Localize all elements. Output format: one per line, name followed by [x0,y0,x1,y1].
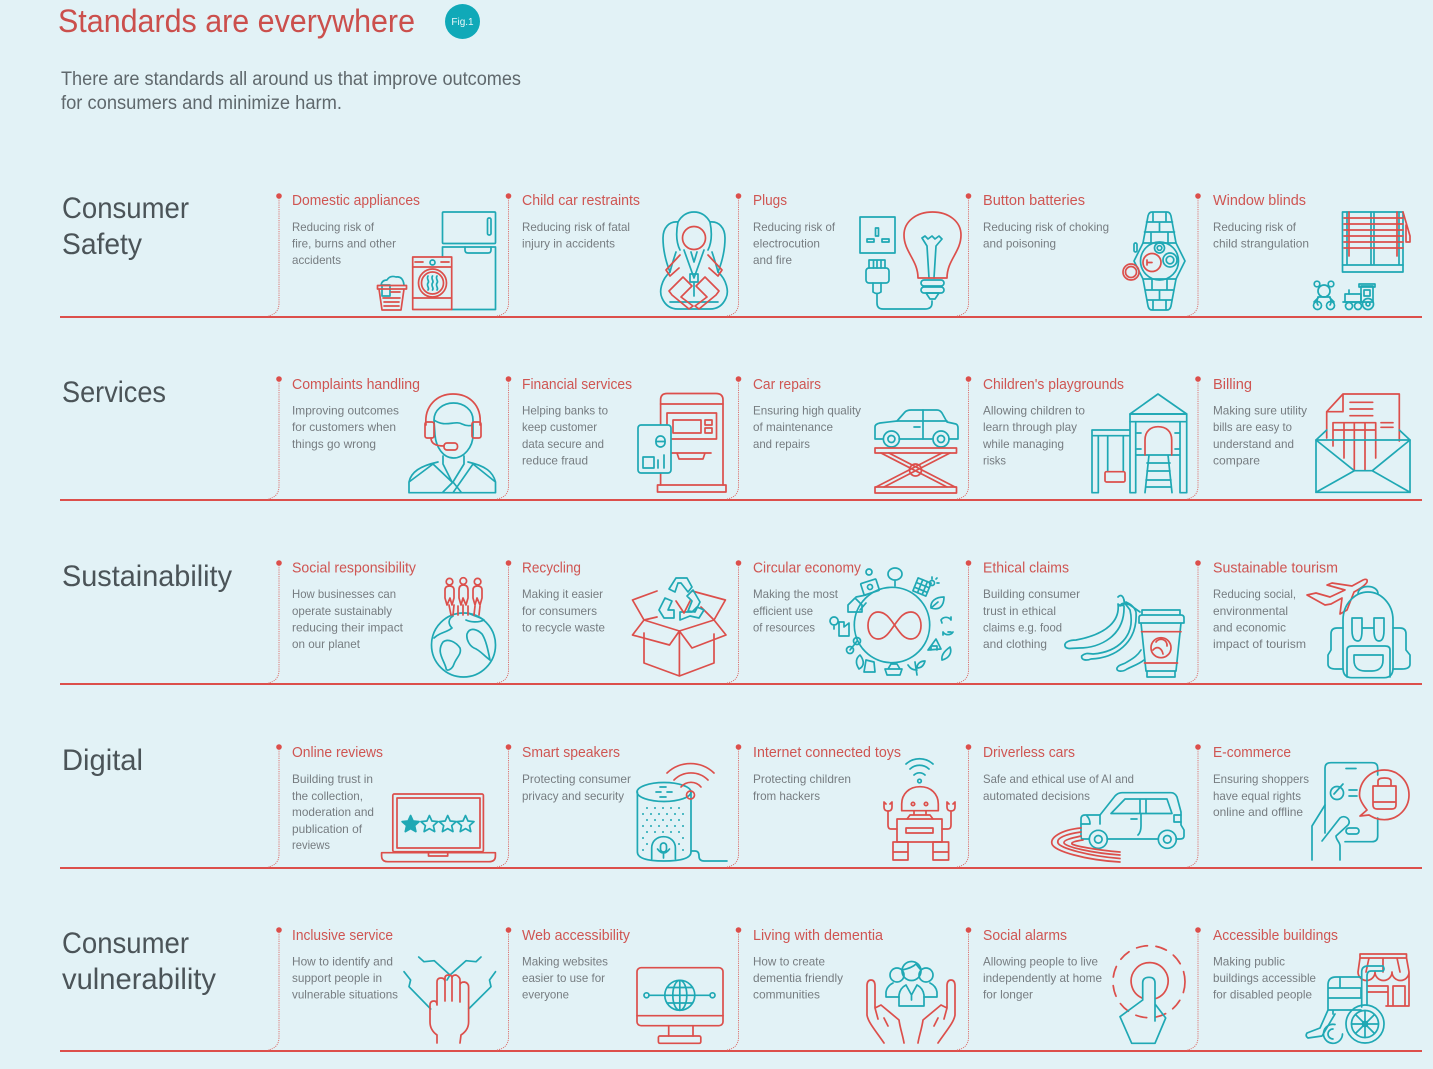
card: Circular economy [727,560,953,683]
panel: Services row [60,376,1422,500]
figure badge [445,4,480,39]
card description: for longer [983,988,1033,1002]
card description [1213,954,1316,1002]
card heading: Plugs [753,193,787,209]
card description: from hackers [753,789,820,803]
card description: data secure and [522,437,604,451]
card description: privacy and security [522,789,624,803]
card description: How to identify and [292,954,393,968]
card heading: Inclusive service [292,928,393,944]
card description: to recycle waste [522,620,605,634]
icon: cash machine and bank card [638,394,726,492]
icon: monitor with globe [637,968,723,1043]
card: Plugs [727,193,961,316]
icon: bananas and ethical coffee cup [1065,596,1184,677]
card description: operate sustainably [292,604,392,618]
card description: Making public [1213,954,1285,968]
icon: cardboard box with recycling symbol [632,578,726,676]
icon: watch and button battery [1123,212,1185,310]
icon: smartphone and shopping speech bubble [1312,763,1409,860]
icon: car on a scissor lift [875,410,958,493]
card description: Protecting consumer [522,772,631,786]
card description [983,772,1134,803]
icon: smart speaker with wifi signal [637,764,727,861]
card description [522,220,630,250]
card heading: Driverless cars [983,745,1075,761]
card description [1213,587,1306,651]
card description: injury in accidents [522,236,615,250]
card description: easier to use for [522,971,605,985]
card heading: Button batteries [983,193,1085,209]
card heading: Domestic appliances [292,193,420,209]
card description: Safe and ethical use of AI and [983,772,1134,786]
card description [1213,772,1309,819]
icon: open envelope with bill [1316,394,1410,492]
card description: learn through play [983,420,1077,434]
card description [522,404,608,468]
card: E-commerce [1187,744,1409,867]
card description [982,404,1085,468]
card: Driverless cars [957,744,1184,867]
title: Standards are everywhere [58,3,415,39]
card description: electrocution [753,236,820,250]
icon: child car seat [661,212,727,309]
figure badge: Fig.1 [451,17,474,28]
card description: reviews [292,838,330,852]
card description: Making it easier [522,587,603,601]
card description [522,772,631,803]
card description: impact of tourism [1213,637,1306,651]
card description: and poisoning [983,236,1056,250]
row heading: Consumer vulnerability: vulnerability [62,963,216,996]
card: Billing [1187,376,1410,499]
card description [292,587,404,651]
icon: socket, plug and light bulb [860,212,961,309]
card description: reducing their impact [292,620,404,634]
card heading: Social alarms [983,928,1067,944]
card description: compare [1213,454,1260,468]
card heading: Social responsibility [292,560,417,576]
row heading: Consumer Safety: Consumer [62,192,189,225]
card description [1213,220,1309,250]
card description: of maintenance [753,420,833,434]
icon: connected robot toy [884,759,955,860]
card description: Reducing risk of [753,220,836,234]
card description: Allowing people to live [983,954,1098,968]
card: Online reviews [268,744,495,867]
card description [522,587,605,634]
card: Child car restraints [497,193,727,316]
card description: Improving outcomes [292,404,399,418]
card description: Ensuring shoppers [1213,772,1309,786]
card description: Reducing risk of fatal [522,220,630,234]
card description: and fire [753,253,792,267]
card description: Ensuring high quality [753,404,861,418]
card description [292,404,399,451]
card description: things go wrong [292,437,376,451]
card: Internet connected toys [727,744,955,867]
card description: Building trust in [292,772,373,786]
card heading: Circular economy [753,560,862,576]
card description: Making websites [522,954,608,968]
card: Complaints handling [268,376,496,499]
card description [983,954,1102,1002]
card description: dementia friendly [753,971,843,985]
card description: support people in [292,971,382,985]
intro text [61,69,521,114]
card heading: Ethical claims [983,560,1069,576]
icon: play structure with swing [1092,394,1187,493]
card: Ethical claims [957,560,1184,683]
card: Smart speakers [497,744,727,867]
panel: Digital row [60,744,1422,868]
card description: and repairs [753,437,810,451]
icon: driverless car with track lines [1052,793,1184,862]
card description: efficient use [753,604,813,618]
card description: claims e.g. food [983,620,1062,634]
card description: Helping banks to [522,404,608,418]
card description: Making sure utility [1213,404,1307,418]
card: Children's playgrounds [957,376,1187,499]
card heading: Car repairs [753,377,821,393]
card description: Protecting children [753,772,851,786]
card description: for disabled people [1213,988,1312,1002]
card description: Building consumer [983,587,1080,601]
card heading: Window blinds [1213,193,1306,209]
card description: environmental [1213,604,1288,618]
card description [292,954,398,1002]
card description: communities [753,988,820,1002]
card description: for customers when [292,420,396,434]
card description: and economic [1213,620,1286,634]
card heading: Smart speakers [522,745,620,761]
card description: vulnerable situations [292,988,398,1002]
card: Web accessibility [497,927,723,1050]
card heading: Child car restraints [522,193,640,209]
icon: fridge, washing machine and laundry basket [378,212,496,310]
panel: Consumer vulnerability row [60,927,1422,1051]
card description: Reducing risk of [292,220,375,234]
icon: finger pressing alarm button [1113,946,1185,1043]
card: Accessible buildings [1187,927,1409,1050]
card: Social responsibility [268,560,496,683]
card description: of resources [753,620,815,634]
card description [522,954,608,1002]
icon: people held in caring hands [867,962,955,1043]
card: Button batteries [957,193,1185,316]
panel: Sustainability row [60,560,1422,684]
card description: Reducing social, [1213,587,1296,601]
card description: publication of [292,822,363,836]
card description [292,220,396,267]
card description: reduce fraud [522,454,588,468]
card description: on our planet [292,637,361,651]
card description: Allowing children to [983,404,1085,418]
row heading: Digital: Digital [62,744,143,777]
card description: accidents [292,253,341,267]
card description [1213,404,1307,468]
icon: circular economy planet with infinity loop [830,568,953,675]
card description: have equal rights [1213,789,1301,803]
card description [292,772,374,852]
card description: risks [983,454,1006,468]
card description: keep customer [522,420,597,434]
card description: online and offline [1213,805,1303,819]
card description [983,220,1109,250]
row heading: Consumer vulnerability: Consumer [62,927,189,960]
card heading: Living with dementia [753,928,884,944]
card description: fire, burns and other [292,236,396,250]
card description [983,587,1080,651]
card: Domestic appliances [268,193,496,316]
card description [753,772,851,803]
icon: laptop with star rating [382,794,495,862]
icon: wheelchair outside an accessible shop [1306,954,1409,1043]
card description: while managing [982,437,1064,451]
card heading: E-commerce [1213,745,1291,761]
row heading: Consumer Safety: Safety [62,228,142,261]
card description: buildings accessible [1213,971,1316,985]
row heading: Consumer Safety [62,192,189,261]
icon: hands in support gesture [404,957,496,1043]
card description: and clothing [983,637,1047,651]
card description: understand and [1213,437,1294,451]
card heading: Sustainable tourism [1213,560,1338,576]
icon: people standing on a globe [432,578,496,677]
card description: Making the most [753,587,839,601]
row heading: Sustainability: Sustainability [62,560,232,593]
card heading: Financial services [522,377,632,393]
icon: aeroplane and backpack [1307,579,1410,678]
card description: Reducing risk of choking [983,220,1109,234]
card description: bills are easy to [1213,420,1292,434]
card: Recycling [497,560,726,683]
card heading: Internet connected toys [753,745,901,761]
card: Social alarms [957,927,1185,1050]
card: Car repairs [727,376,958,499]
card heading: Children's playgrounds [983,377,1124,393]
card description: for consumers [522,604,597,618]
card description: How businesses can [292,587,396,601]
card description [753,587,839,634]
card heading: Online reviews [292,745,383,761]
card description: the collection, [292,789,363,803]
card description: Reducing risk of [1213,220,1297,234]
card description: everyone [522,988,569,1002]
card: Inclusive service [268,927,496,1050]
card description: independently at home [983,971,1102,985]
card: Financial services [497,376,726,499]
card description: trust in ethical [983,604,1056,618]
card description: How to create [753,954,825,968]
icon: window blinds, teddy and toy train [1314,212,1410,310]
panel: Consumer Safety row [60,192,1422,317]
card description [753,404,861,451]
intro text: for consumers and minimize harm. [61,93,342,114]
card description: automated decisions [983,789,1090,803]
card: Living with dementia [727,927,955,1050]
card: Window blinds [1187,193,1410,316]
card heading: Billing [1213,377,1252,393]
card: Sustainable tourism [1187,560,1410,683]
intro text: There are standards all around us that improve outcomes [61,69,521,90]
card description [753,954,843,1002]
row heading: Services: Services [62,376,166,409]
row heading: Consumer vulnerability [62,927,216,996]
card heading: Web accessibility [522,928,631,944]
card heading: Recycling [522,560,581,576]
card description: child strangulation [1213,236,1309,250]
card description: moderation and [292,805,374,819]
card heading: Complaints handling [292,377,420,393]
card heading: Accessible buildings [1213,928,1338,944]
icon: customer service agent with headset [409,394,496,493]
card description [753,220,836,267]
